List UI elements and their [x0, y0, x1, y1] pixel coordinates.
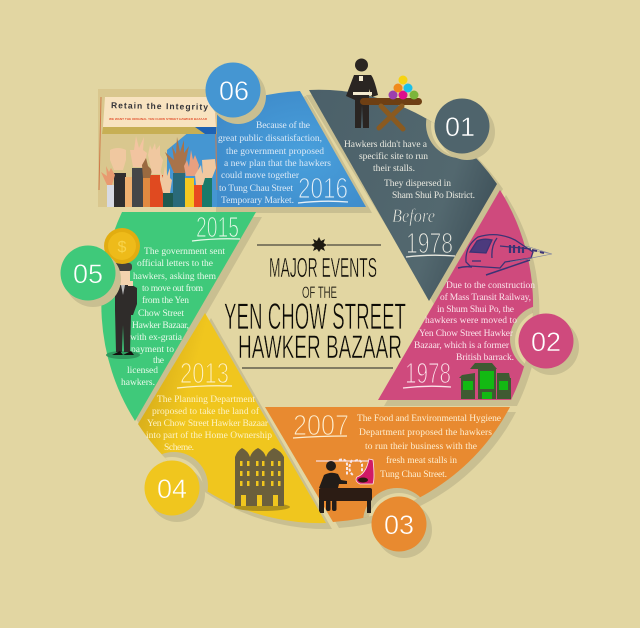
protest banner: WE WANT THE ORIGINAL YEN CHOW STREET HAWKER BAZAAR	[109, 117, 208, 121]
text: 04 body: Scheme.	[164, 443, 194, 453]
text: 01 body: their stalls.	[373, 164, 415, 174]
icon: official with coin	[104, 228, 140, 359]
text: 05 body	[121, 247, 225, 388]
year: before 1978: Before	[392, 206, 435, 227]
text: 02 body: British barrack.	[456, 353, 514, 363]
title text: YEN CHOW STREET	[224, 296, 406, 337]
badge 02: 02	[531, 327, 561, 357]
badge 01: 01	[445, 112, 475, 142]
panel: 05 2015	[101, 212, 256, 421]
icon: dollar coin: $	[118, 239, 127, 256]
raised arms	[101, 136, 216, 207]
year: before 1978	[392, 206, 455, 260]
title text: OF THE	[302, 284, 337, 302]
badge 01	[434, 98, 495, 160]
text: 05 body: from the Yen	[142, 295, 189, 306]
year: before 1978: 1978	[406, 228, 453, 260]
text: 06 body	[218, 120, 331, 206]
icon: meat vendor	[316, 459, 374, 513]
text: 04 body: The Planning Department	[157, 395, 255, 405]
title block	[224, 237, 406, 368]
badge 06: 06	[219, 76, 249, 106]
year: 1978: 1978	[405, 358, 451, 390]
panel: 06 2016	[210, 91, 366, 207]
text: 04 body: Yen Chow Street Hawker Bazaar	[147, 419, 269, 429]
text: 01 body: They dispersed in	[384, 179, 451, 189]
badge 04: 04	[157, 474, 187, 504]
badge cut-out 01	[426, 119, 456, 158]
segment shadows	[107, 94, 539, 529]
text: 06 body: the government proposed	[226, 147, 324, 157]
year: 2015: 2015	[196, 212, 239, 244]
badge cut-out 02	[510, 306, 533, 366]
text: 05 body: payment to	[131, 345, 174, 355]
text: 04 body: proposed to take the land of	[152, 406, 260, 417]
protest banner: Retain the Integrity	[111, 100, 208, 112]
text: 03 body	[357, 414, 501, 480]
text: 05 body: with ex-gratia	[130, 333, 183, 343]
text: 01 body: specific site to run	[359, 151, 428, 162]
title text: MAJOR EVENTS	[269, 252, 377, 283]
text: 06 body: Temporary Market.	[221, 196, 294, 206]
year: 1978	[403, 358, 451, 390]
panel: 04 2013	[138, 313, 326, 523]
text: 06 body: a new plan that the hawkers	[224, 159, 331, 169]
text: 01 body: Sham Shui Po District.	[392, 191, 475, 201]
text: 03 body: fresh meat stalls in	[386, 455, 457, 466]
text: 03 body: Tung Chau Street.	[380, 470, 447, 480]
text: 03 body: Department proposed the hawkers	[359, 428, 492, 438]
text: 03 body: to run their business with the	[365, 442, 477, 452]
text: 02 body: of Mass Transit Railway,	[440, 292, 531, 303]
text: 02 body: in Shum Shui Po, the	[437, 305, 514, 315]
text: 06 body: could move together	[221, 171, 300, 181]
icon: coloured fruit pile	[388, 76, 418, 100]
text: 02 body	[414, 281, 535, 363]
protest banner	[103, 97, 216, 127]
text: 05 body: to move out from	[142, 283, 204, 294]
icon: train	[458, 235, 552, 275]
text: 03 body: The Food and Environmental Hygiene	[357, 414, 501, 424]
text: 05 body: the	[153, 356, 164, 366]
title ornament	[257, 237, 381, 252]
badge 03: 03	[384, 510, 414, 540]
panel: 03 2007	[265, 407, 510, 522]
text: 06 body: great public dissatisfaction,	[218, 133, 322, 144]
badge 05	[60, 246, 121, 307]
text: 02 body: Due to the construction	[446, 281, 535, 291]
title text	[224, 252, 406, 365]
year: 2013: 2013	[180, 358, 229, 390]
badge 03	[372, 496, 432, 558]
badge 04	[144, 460, 205, 522]
title text: HAWKER BAZAAR	[238, 329, 402, 365]
badge cut-out 04	[162, 452, 208, 492]
year: 2016: 2016	[298, 173, 348, 205]
text: 05 body: Chow Street	[138, 309, 184, 319]
text: 05 body: hawkers.	[121, 378, 155, 388]
icon: barrack building	[459, 363, 511, 399]
badge 06	[206, 62, 266, 124]
panel: 01 before 1978	[309, 90, 497, 301]
text: 04 body: into part of the Home Ownership	[146, 430, 272, 441]
text: 05 body: hawkers, asking them	[133, 272, 217, 282]
text: 05 body: licensed	[127, 366, 158, 376]
badge cut-out 03	[363, 488, 420, 518]
icon: hawker with fruit stall	[346, 58, 422, 129]
text: 01 body: Hawkers didn't have a	[344, 140, 428, 150]
text: 05 body: Hawker Bazaar,	[132, 321, 189, 331]
badge 02	[518, 314, 579, 375]
picture: retain the integrity protest	[98, 89, 217, 207]
text: 06 body: Because of the	[256, 120, 310, 131]
text: 02 body: hawkers were moved to	[425, 316, 517, 326]
panel: 02 1978	[378, 190, 552, 400]
text: 04 body	[146, 395, 272, 453]
text: 05 body: official letters to the	[137, 258, 213, 269]
badge 05: 05	[73, 259, 103, 289]
text: 02 body: Yen Chow Street Hawker	[419, 329, 514, 339]
text: 02 body: Bazaar, which is a former	[414, 340, 510, 351]
year: 2015	[192, 212, 240, 244]
year: 2007: 2007	[293, 410, 349, 442]
text: 05 body: The government sent	[144, 247, 225, 257]
text: 01 body	[344, 140, 475, 201]
icon: housing towers	[234, 448, 290, 511]
text: 06 body: to Tung Chau Street	[219, 184, 293, 194]
